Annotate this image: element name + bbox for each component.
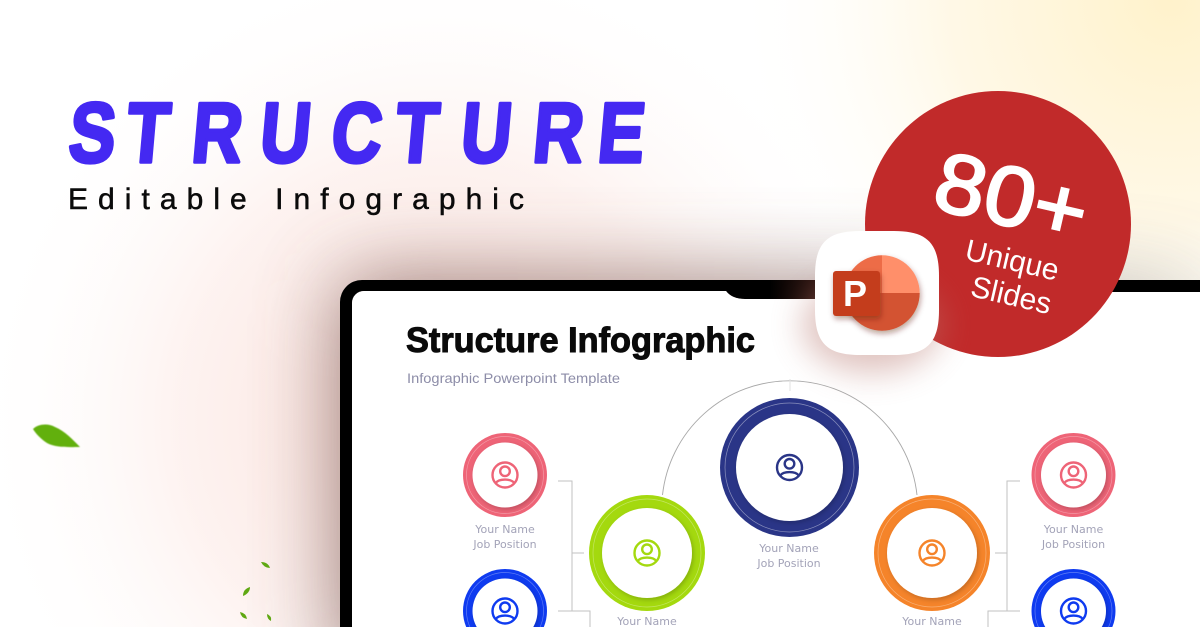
left bracket connector [558, 481, 590, 627]
slide subheading: Infographic Powerpoint Template [407, 371, 620, 386]
label: top right [1041, 523, 1105, 551]
node: orange [874, 495, 990, 611]
label: top left [472, 523, 537, 551]
node: top right pink [1032, 433, 1116, 517]
label: top right: Job Position [1041, 538, 1105, 551]
leaf: large [33, 425, 80, 447]
label: navy centre [756, 542, 821, 570]
tablet frame [340, 280, 1200, 627]
badge caption line 2: Slides [968, 270, 1055, 321]
tablet screen [352, 291, 1200, 627]
arc connector [662, 379, 917, 495]
P square: P [843, 273, 867, 314]
leaf: small top [261, 562, 270, 568]
badge number: 80+ [926, 133, 1097, 260]
icon: PowerPoint app tile [802, 231, 942, 373]
node: top left pink [463, 433, 547, 517]
node: bottom left blue [463, 569, 547, 627]
node: bottom right blue [1032, 569, 1116, 627]
node: green [589, 495, 705, 611]
leaf: small middle [243, 587, 250, 596]
pie [844, 255, 920, 331]
leaf: small bottom left [240, 612, 247, 619]
node: navy centre [720, 398, 859, 537]
subtitle: Editable Infographic [68, 183, 524, 216]
P square [833, 271, 880, 316]
leaf: small bottom right [267, 614, 271, 621]
title: STRUCTURE [65, 85, 649, 181]
label: top right: Your Name [1043, 523, 1103, 536]
label: navy centre: Job Position [756, 557, 821, 570]
slide heading: Structure Infographic [406, 321, 755, 360]
label: top left: Job Position [472, 538, 537, 551]
label: navy centre: Your Name [758, 542, 819, 555]
tablet mockup [340, 280, 1200, 627]
right bracket connector [988, 481, 1020, 627]
label: top left: Your Name [474, 523, 535, 536]
badge: 80+ unique slides [865, 91, 1131, 357]
badge caption line 1: Unique [962, 234, 1062, 288]
